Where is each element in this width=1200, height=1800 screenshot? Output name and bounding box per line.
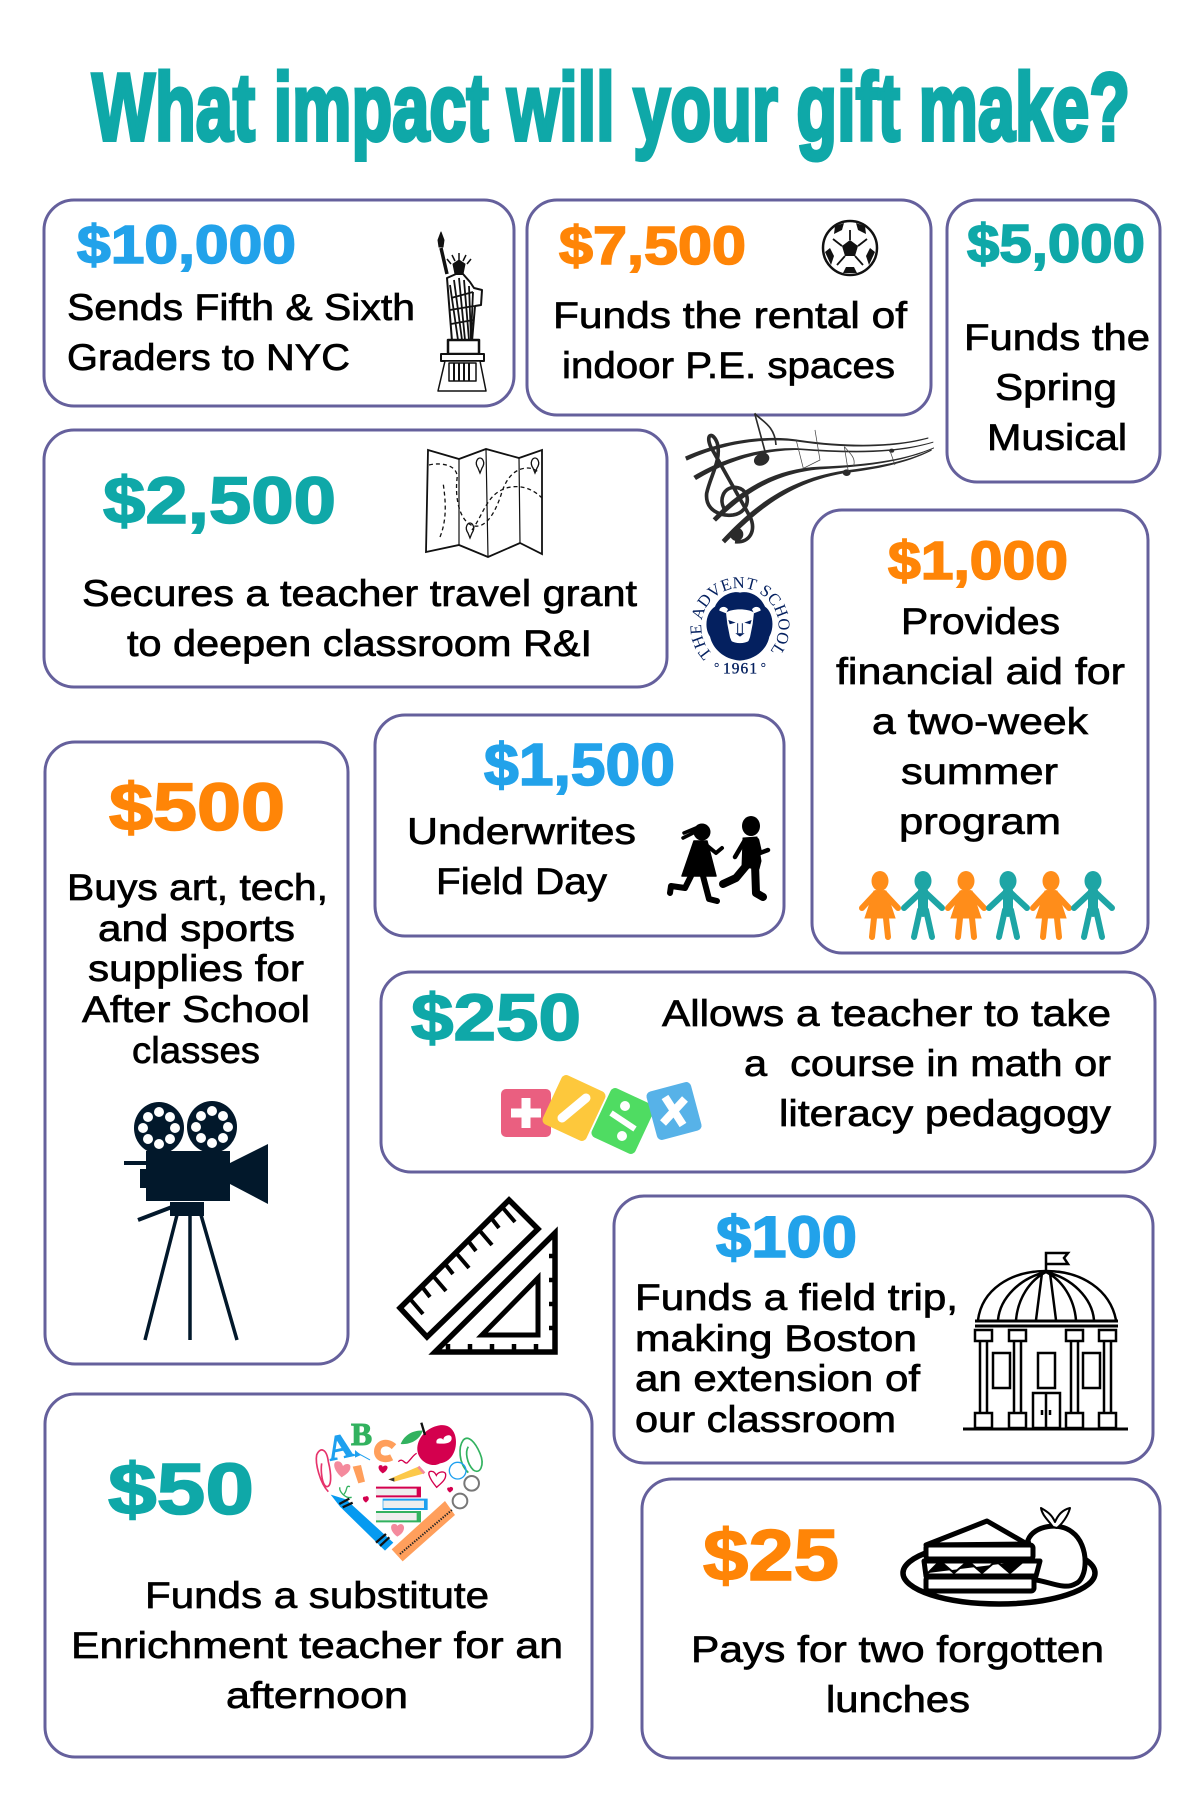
text: supplies: supplies for (88, 948, 304, 989)
text: field day: Field Day (436, 861, 608, 902)
amount: $7,500: $7,500 (559, 216, 746, 276)
icon: film camera on tripod (124, 1101, 268, 1340)
text: supplies: and sports (98, 908, 295, 949)
text: teacher course: literacy pedagogy (779, 1093, 1112, 1134)
panel: $100 (614, 1196, 1153, 1463)
panel: $2,500 (44, 430, 667, 687)
text: field day: Underwrites (407, 811, 636, 852)
amount: $25: $25 (703, 1516, 839, 1596)
text: forgotten lunches (691, 1629, 1104, 1720)
panel: $1,000 (812, 510, 1148, 953)
text: NYC trip (67, 287, 415, 378)
text: supplies: Buys art, tech, (67, 867, 328, 908)
panel: $1,500 (375, 715, 784, 936)
text: Boston field trip: our classroom (635, 1399, 896, 1440)
panel: $25 (642, 1479, 1160, 1758)
amount: $250: $250 (411, 980, 581, 1054)
text: financial aid: Provides (901, 601, 1060, 642)
text: financial aid: program (899, 801, 1061, 842)
panel: $10,000 (44, 200, 514, 406)
icon: running children (670, 816, 768, 901)
text: teacher course: Allows a teacher to take (662, 993, 1111, 1034)
panel: $7,500 (527, 200, 931, 415)
text: financial aid: summer (901, 751, 1058, 792)
icon: music staff (685, 413, 934, 543)
panel: $5,000 (947, 200, 1160, 482)
text: Boston field trip: Funds a field trip, (635, 1277, 958, 1318)
icon: school supplies heart (316, 1417, 482, 1561)
text: Boston field trip: making Boston (635, 1318, 917, 1359)
amount: $1,500: $1,500 (484, 732, 675, 798)
icon: Statue of Liberty (438, 232, 486, 391)
text: substitute teacher (71, 1575, 563, 1716)
icon: ruler and set square (400, 1200, 555, 1352)
text: substitute teacher: Enrichment teacher for an (71, 1625, 563, 1666)
text: financial aid (836, 601, 1125, 842)
icon: school supplies heart: A (324, 1425, 357, 1469)
text: Boston field trip (635, 1277, 958, 1440)
text: field day (407, 811, 636, 902)
icon: paper people chain (862, 871, 1112, 937)
text: forgotten lunches: Pays for two forgotten (691, 1629, 1104, 1670)
icon: sandwich and apple plate (903, 1508, 1095, 1604)
text: travel grant (82, 573, 638, 664)
logo: The Advent School seal (690, 577, 790, 677)
text: travel grant: to deepen classroom R&I (127, 623, 592, 664)
icon: math symbol tiles (501, 1073, 703, 1156)
icon: domed building (963, 1253, 1128, 1429)
text: financial aid: financial aid for (836, 651, 1125, 692)
seal year: 1961 (723, 660, 757, 677)
panel: $50 (45, 1394, 592, 1757)
text: supplies (67, 867, 328, 1071)
text: substitute teacher: Funds a substitute (145, 1575, 489, 1616)
panel: $250 (381, 972, 1155, 1172)
text: NYC trip: Sends Fifth & Sixth (67, 287, 415, 328)
text: financial aid: a two-week (872, 701, 1089, 742)
icon: school supplies heart: B (351, 1417, 372, 1452)
text: spring musical: Musical (987, 417, 1127, 458)
seal lettering: THE ADVENT SCHOOL (690, 577, 790, 661)
icon: soccer ball (823, 221, 877, 275)
text: NYC trip: Graders to NYC (67, 337, 350, 378)
amount: $500: $500 (109, 770, 285, 845)
text: Boston field trip: an extension of (635, 1358, 921, 1399)
text: teacher course: a course in math or (744, 1043, 1111, 1084)
text: substitute teacher: afternoon (226, 1675, 408, 1716)
text: travel grant: Secures a teacher travel grant (82, 573, 638, 614)
text: P.E. spaces (553, 295, 908, 386)
seal lion (706, 592, 772, 661)
icon: folded map (426, 449, 542, 557)
amount: $10,000: $10,000 (77, 215, 296, 275)
text: supplies: After School (82, 989, 310, 1030)
amount: $5,000: $5,000 (967, 214, 1145, 274)
text: spring musical: Funds the (964, 317, 1150, 358)
text: supplies: classes (132, 1030, 260, 1071)
text: forgotten lunches: lunches (826, 1679, 970, 1720)
panel: $500 (45, 742, 348, 1364)
amount: $100: $100 (716, 1205, 857, 1270)
text: spring musical: Spring (995, 367, 1117, 408)
text: spring musical (964, 317, 1150, 458)
text: P.E. spaces: Funds the rental of (553, 295, 908, 336)
amount: $2,500: $2,500 (103, 463, 336, 537)
text: P.E. spaces: indoor P.E. spaces (562, 345, 895, 386)
amount: $50: $50 (108, 1450, 254, 1530)
amount: $1,000: $1,000 (888, 531, 1068, 591)
text: teacher course (662, 993, 1112, 1134)
